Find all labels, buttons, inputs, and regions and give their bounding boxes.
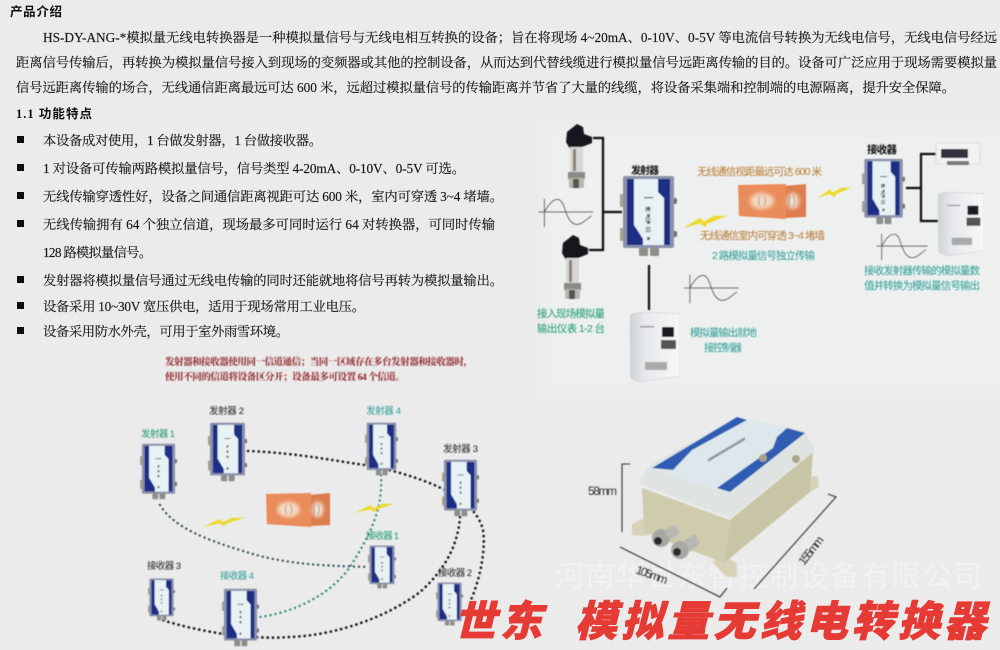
- intro paragraph: [16, 29, 997, 96]
- icon: transmitter 1: [140, 444, 177, 499]
- bullet text: [43, 132, 503, 340]
- note: channels: 发射器和接收器使用同一信道通信；当同一区域存在多台发射器和接收器时，: [165, 356, 473, 368]
- icon: transmitter: 转: [645, 206, 651, 214]
- label: wall penetration: 无线通信室内可穿透 3~4 堵墙: [700, 229, 826, 242]
- icon: wireless bolt left: [203, 518, 245, 527]
- icon: receiver 2: [436, 583, 463, 625]
- icon: inverter controller: [630, 312, 680, 382]
- label: local controller output: 模拟量输出就地: [690, 326, 758, 339]
- label: 58mm: 58mm: [588, 484, 617, 498]
- label: connected instruments: 接入现场模拟量: [537, 307, 606, 320]
- label: connected instruments: 输出仪表 1-2 台: [537, 322, 605, 335]
- note: channels: [165, 356, 473, 383]
- device labels: 发射器 2: [209, 405, 244, 417]
- label: receiver description: 接收发射器传输的模拟量数: [864, 264, 980, 277]
- text block: features list: [16, 106, 503, 340]
- icon: transmitter 3: [442, 460, 479, 516]
- link: transmitter 4 to receiver 4: [260, 475, 381, 617]
- bullet text: 设备采用防水外壳，可用于室外雨雪环境。: [43, 323, 289, 340]
- device labels: 发射器 3: [443, 443, 478, 455]
- panel: product photo with dimensions: [588, 417, 836, 597]
- lid top: [651, 417, 803, 494]
- device labels: 接收器 3: [147, 560, 181, 572]
- icon: transmitter 2: [208, 423, 247, 481]
- icon: receiver: [862, 159, 905, 224]
- lid blue accents: [652, 417, 747, 470]
- icon: panel meter: [936, 143, 980, 165]
- device labels: 发射器 4: [366, 405, 401, 417]
- chart: input waveform: [539, 199, 593, 227]
- title: brand: 世东: [454, 598, 548, 645]
- icon: receiver: 转: [880, 183, 886, 190]
- icon: transmitter: 器: [645, 226, 651, 234]
- label: 155mm: 155mm: [795, 533, 827, 568]
- panel: system wiring diagram: [537, 124, 984, 382]
- heading: product intro: 产品介绍: [10, 4, 62, 19]
- label: connected instruments: [537, 307, 606, 335]
- lid skirt: [638, 417, 815, 518]
- icon: transmitter: 换: [645, 216, 651, 224]
- label: receiver description: 值并转换为模拟量信号输出: [864, 279, 980, 292]
- icon: receiver: 换: [880, 191, 886, 198]
- label: receiver: 接收器: [867, 143, 898, 156]
- icon: pressure sensor 2: [562, 235, 588, 299]
- intro paragraph: 信号远距离传输的场合，无线通信距离最远可达 600 米，远超过模拟量信号的传输距离并节省了大量的线缆，将设备采集端和控制端的电源隔离，提升安全保障。: [16, 79, 955, 96]
- icon: pressure sensor 1: [566, 124, 592, 188]
- watermark: company name: 河南华世东智控制设备有限公司: [555, 560, 982, 593]
- icon: wireless bolt right: [355, 504, 394, 513]
- note: channels: 使用不同的信道将设备区分开；设备最多可设置 64 个信道。: [165, 371, 405, 383]
- cable gland left: [652, 525, 680, 547]
- icon: receiver 3: [148, 579, 175, 620]
- device labels: 接收器 1: [366, 530, 399, 542]
- link: transmitter 2 to receiver 2: [248, 451, 484, 602]
- dimension lines: [620, 464, 836, 597]
- link: transmitter 3 to receiver 3: [162, 517, 460, 638]
- icon: receiver 1: [368, 546, 396, 588]
- photo: enclosure: [632, 417, 819, 577]
- icon: transmitter: [620, 176, 677, 256]
- link: transmitter 1 to receiver 1: [160, 505, 368, 567]
- panel: multi-channel network diagram: [140, 356, 484, 646]
- intro paragraph: HS-DY-ANG-*模拟量无线电转换器是一种模拟量信号与无线电相互转换的设备；旨在将现场 4~20mA、0-10V、0-5V 等电流信号转换为无线电信号，无线电信号经远: [43, 29, 997, 46]
- intro paragraph: 距离信号传输后，再转换为模拟量信号接入到现场的变频器或其他的控制设备，从而达到代替线缆进行模拟量信号远距离传输的目的。设备可广泛应用于现场需要模拟量: [16, 54, 997, 71]
- title: product: 模拟量无线电转换器: [575, 598, 990, 645]
- icon: brick walls: [266, 493, 330, 527]
- diagram background: [545, 130, 1000, 390]
- label: two independent channels: 2 路模拟量信号独立传输: [712, 249, 816, 262]
- icon: wireless bolt 1: [683, 216, 727, 228]
- label: transmitter: 发射器: [631, 164, 659, 177]
- bullet markers: [17, 136, 24, 334]
- bullet text: 发射器将模拟量信号通过无线电传输的同时还能就地将信号再转为模拟量输出。: [43, 272, 503, 288]
- bullet text: 设备采用 10~30V 宽压供电，适用于现场常用工业电压。: [43, 298, 365, 315]
- front face: [642, 488, 730, 563]
- bullet text: 本设备成对使用，1 台做发射器，1 台做接收器。: [43, 132, 322, 149]
- wiring lines: [589, 138, 938, 310]
- device labels: [141, 405, 478, 582]
- cable gland right: [671, 534, 700, 559]
- bullet text: 无线传输拥有 64 个独立信道，现场最多可同时运行 64 对转换器，可同时传输: [43, 216, 495, 233]
- title: brand and product name: [454, 598, 990, 645]
- label: 105mm: 105mm: [634, 563, 670, 587]
- device labels: 接收器 4: [220, 570, 254, 582]
- icon: receiver: 器: [880, 199, 886, 206]
- icon: receiver 4: [222, 589, 259, 646]
- right face: [724, 452, 813, 563]
- screw posts: [759, 454, 767, 462]
- heading: features: 1.1 功能特点: [16, 106, 92, 121]
- bullet text: 无线传输穿透性好，设备之间通信距离视距可达 600 米，室内可穿透 3~4 堵墙。: [43, 188, 503, 205]
- icon: wireless bolt 2: [817, 188, 851, 198]
- chart: output waveform: [684, 275, 739, 303]
- label: line-of-sight distance: 无线通信视距最远可达 600 米: [697, 165, 822, 178]
- label: local controller output: [690, 326, 758, 354]
- mounting ears: [632, 519, 660, 536]
- bullet text: 1 对设备可传输两路模拟量信号，信号类型 4-20mA、0-10V、0-5V 可选。: [43, 160, 465, 177]
- icon: inverter receiver side: [938, 192, 984, 256]
- device labels: 发射器 1: [141, 428, 175, 440]
- bullet text: 128 路模拟量信号。: [43, 244, 152, 260]
- text block: product intro: [10, 4, 997, 96]
- label: receiver description: [864, 264, 980, 292]
- label: local controller output: 接控制器: [704, 341, 742, 354]
- icon: brick walls: [738, 184, 806, 219]
- icon: transmitter 4: [365, 423, 398, 475]
- device labels: 接收器 2: [438, 567, 472, 579]
- chart: receiver waveform: [876, 234, 928, 260]
